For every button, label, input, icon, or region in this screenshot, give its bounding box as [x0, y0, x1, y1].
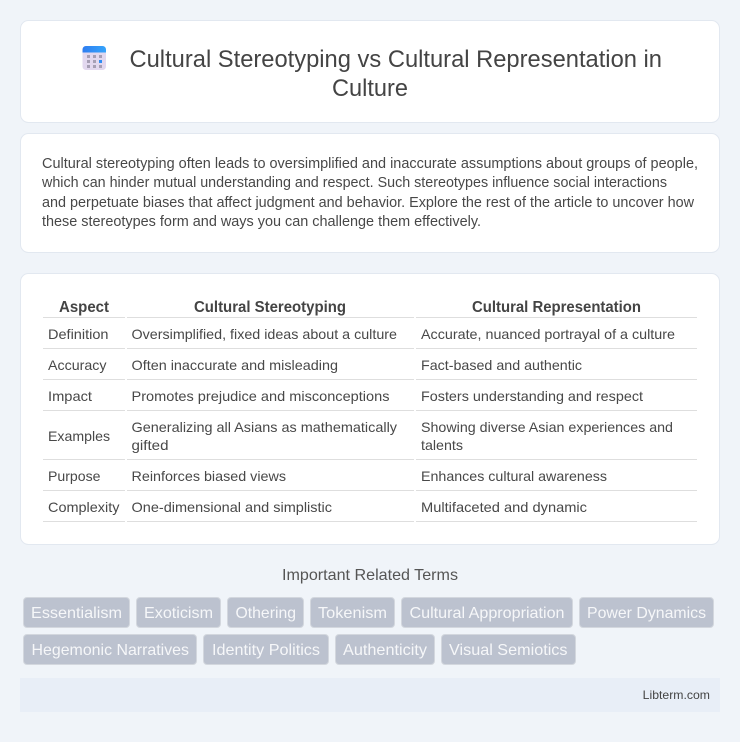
row: examples	[48, 419, 673, 453]
row: definition: Oversimplified, fixed ideas about a culture	[132, 326, 397, 342]
panel: introduction	[20, 134, 720, 252]
title	[130, 46, 662, 102]
row: complexity: One-dimensional and simplistic	[132, 499, 332, 515]
intro paragraph: Cultural stereotyping often leads to oversimplified and inaccurate assumptions about groups of people,	[42, 156, 698, 172]
intro paragraph	[41, 156, 698, 230]
intro paragraph: and perpetuate biases that affect judgment and behavior. Explore the rest of the article to uncover how	[42, 195, 695, 211]
tag: Visual Semiotics	[442, 634, 576, 664]
row: examples: Generalizing all Asians as mathematically	[132, 419, 397, 435]
row: complexity: Multifaceted and dynamic	[421, 499, 587, 515]
row: examples: Showing diverse Asian experiences and	[421, 419, 673, 435]
row: purpose: Reinforces biased views	[132, 468, 286, 484]
title: Culture	[332, 75, 408, 102]
tag: Identity Politics	[204, 634, 328, 664]
tag: Identity Politics: Identity Politics	[212, 642, 320, 659]
tag: Visual Semiotics: Visual Semiotics	[449, 642, 568, 659]
tag: Authenticity	[336, 634, 434, 664]
table header: Aspect	[59, 299, 110, 316]
tag: Exoticism: Exoticism	[144, 605, 213, 622]
tag: Hegemonic Narratives	[24, 634, 196, 664]
tag: Tokenism: Tokenism	[318, 605, 387, 622]
heading: related terms: Important Related Terms	[282, 567, 458, 584]
footer source: Libterm.com	[643, 688, 710, 702]
tag: Hegemonic Narratives: Hegemonic Narratives	[32, 642, 189, 659]
title: Cultural Stereotyping vs Cultural Representation in	[130, 46, 662, 73]
row: impact	[48, 388, 643, 404]
table header	[59, 299, 641, 316]
row: accuracy: Fact-based and authentic	[421, 357, 582, 373]
tag: Power Dynamics	[580, 598, 714, 628]
row: examples: gifted	[132, 437, 168, 453]
intro paragraph: which can hinder mutual understanding and respect. Such stereotypes influence social interactions	[41, 175, 667, 191]
row: purpose	[48, 468, 607, 484]
row: examples: talents	[421, 437, 463, 453]
table header: Cultural Representation	[472, 299, 641, 316]
row: examples: Examples	[48, 428, 110, 444]
row: complexity: Complexity	[48, 499, 120, 515]
row: complexity	[48, 499, 587, 515]
tag: Cultural Appropriation: Cultural Appropriation	[410, 605, 564, 622]
row: purpose: Enhances cultural awareness	[421, 468, 607, 484]
tag: Power Dynamics: Power Dynamics	[587, 605, 706, 622]
tag: Exoticism	[136, 598, 220, 628]
table header: Cultural Stereotyping	[194, 299, 346, 316]
footer	[20, 678, 720, 712]
row: definition: Accurate, nuanced portrayal of a culture	[421, 326, 675, 342]
tag: Othering: Othering	[236, 605, 296, 622]
row: impact: Promotes prejudice and misconceptions	[132, 388, 390, 404]
icon: calendar	[82, 46, 106, 70]
tag: Tokenism	[310, 598, 394, 628]
tag: Essentialism	[24, 598, 130, 628]
row: impact: Fosters understanding and respect	[421, 388, 643, 404]
row: definition	[48, 326, 675, 342]
tag: Authenticity: Authenticity	[343, 642, 427, 659]
intro paragraph: these stereotypes form and ways you can challenge them effectively.	[42, 214, 481, 230]
row: impact: Impact	[48, 388, 92, 404]
tag group: related terms	[24, 598, 714, 664]
row: accuracy: Accuracy	[48, 357, 106, 373]
panel: title card	[20, 20, 720, 122]
tag: Othering	[228, 598, 304, 628]
row: purpose: Purpose	[48, 468, 101, 484]
row: accuracy	[48, 357, 582, 373]
tag: Essentialism: Essentialism	[31, 605, 122, 622]
row: accuracy: Often inaccurate and misleading	[132, 357, 338, 373]
tag: Cultural Appropriation	[402, 598, 572, 628]
panel: comparison table	[20, 274, 720, 544]
row: definition: Definition	[48, 326, 108, 342]
